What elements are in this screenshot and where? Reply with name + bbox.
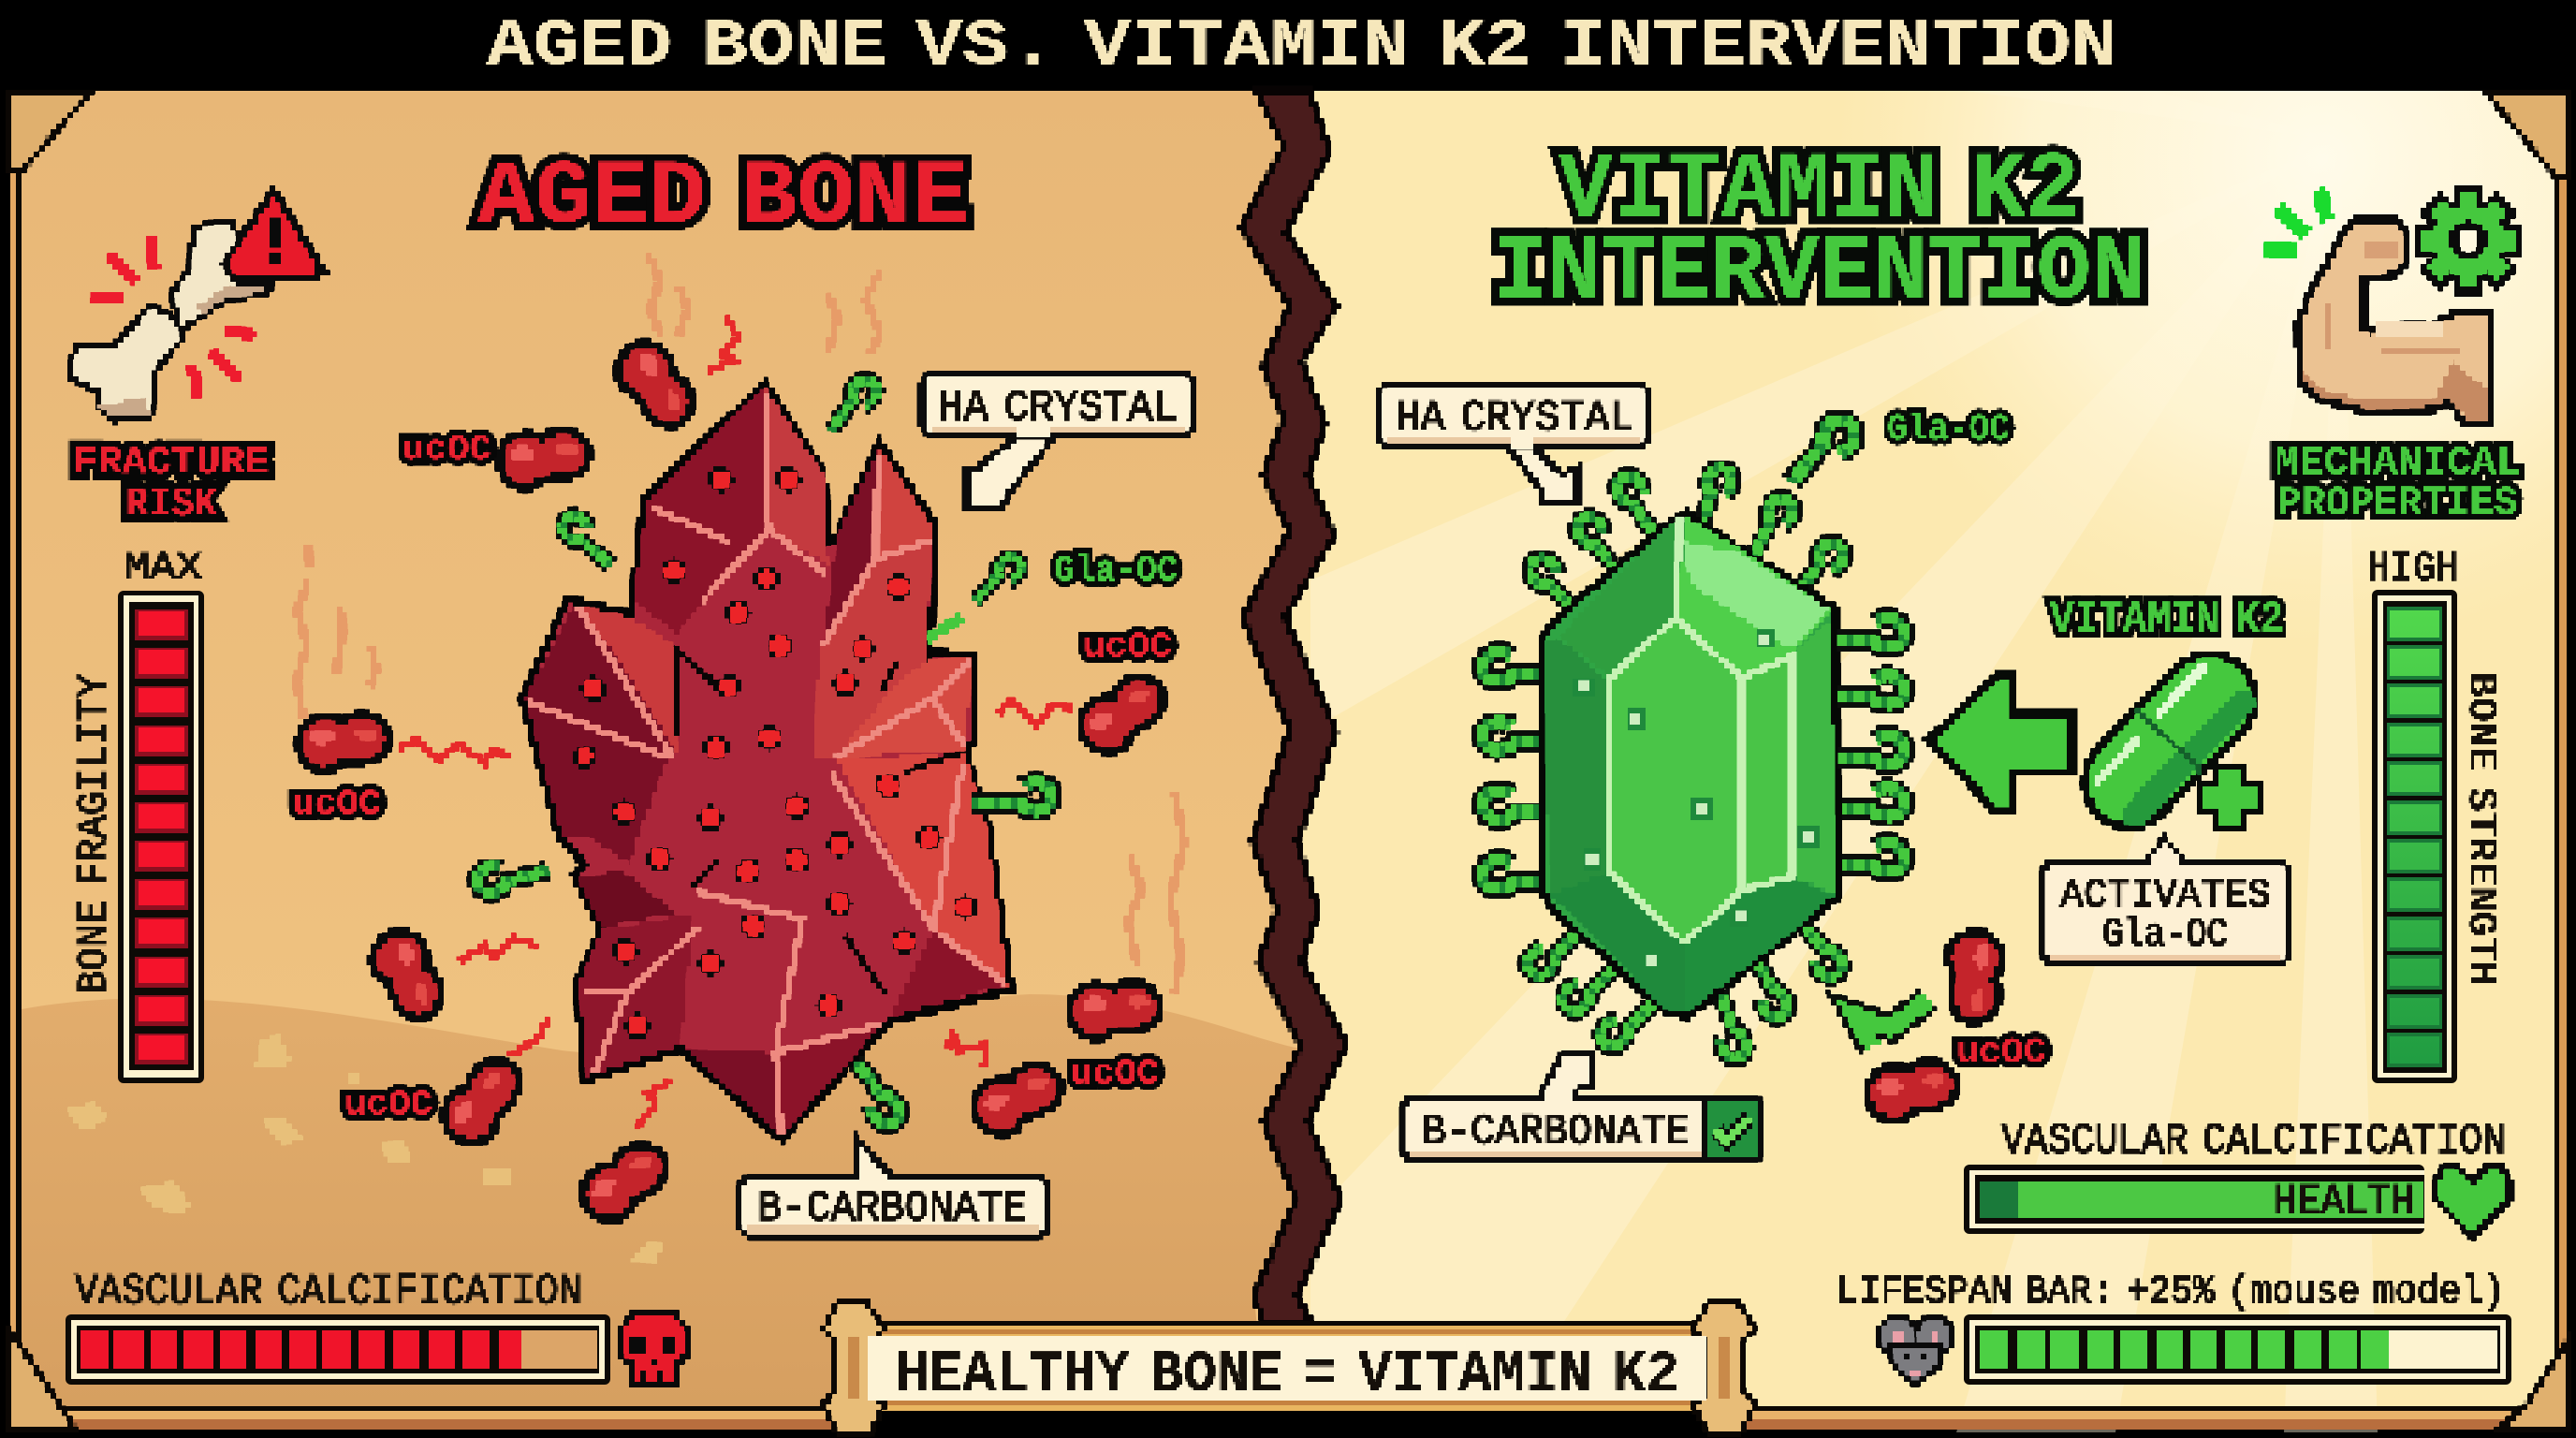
main title: AGED BONE VS. VITAMIN K2 INTERVENTION	[487, 10, 2117, 84]
bone strength meter	[2372, 590, 2457, 1083]
label: ucOC left: ucOC	[292, 785, 381, 825]
label: ucOC lower right: ucOC	[1071, 1054, 1159, 1094]
B-carbonate callout with checkmark	[1404, 1052, 1762, 1161]
HA crystal callout bubble right	[1378, 385, 1649, 503]
banner top border	[842, 1321, 1732, 1336]
callout text: B-carbonate: B-CARBONATE	[757, 1185, 1027, 1233]
callout text: HA crystal: HA CRYSTAL	[939, 384, 1178, 433]
sun rays	[1310, 91, 2378, 1432]
label: ucOC right panel: ucOC	[1956, 1033, 2046, 1073]
panel: aged bone	[66, 147, 1193, 1385]
B-carbonate callout bubble	[739, 1140, 1048, 1236]
label: risk: RISK	[125, 481, 218, 528]
vitamin K2 text labels	[1396, 139, 2521, 1314]
icon: fractured bone with warning	[69, 191, 324, 420]
left panel base	[22, 91, 1301, 1409]
icon: red skull	[621, 1314, 686, 1384]
black base under banner	[842, 1411, 1732, 1438]
icon: plus sign	[2202, 768, 2259, 827]
label: fracture risk: FRACTURE	[73, 440, 270, 485]
aged bone text labels	[71, 147, 1178, 1316]
label: ucOC right: ucOC	[1083, 627, 1172, 668]
activates callout bubble	[2043, 838, 2289, 964]
arrow: K2 to crystal	[1929, 676, 2071, 810]
label: Gla-OC: Gla-OC	[1054, 550, 1178, 593]
heading: vitamin K2: VITAMIN K2	[1559, 139, 2080, 244]
bone end: left	[824, 1303, 884, 1432]
callout text: HA crystal right: HA CRYSTAL	[1396, 394, 1634, 443]
label: vascular calcification: VASCULAR CALCIFICATION	[75, 1268, 582, 1316]
vitamin K2 pixel art	[1378, 186, 2523, 1384]
icon: mouse	[1879, 1317, 1953, 1384]
vascular health bar	[1964, 1165, 2424, 1234]
icon: vitamin K2 capsule	[2067, 636, 2273, 845]
mineral dots on red crystal	[573, 466, 977, 1039]
lifespan bar	[1964, 1314, 2511, 1385]
callout text: B-carbonate right: B-CARBONATE	[1422, 1108, 1690, 1156]
right panel base	[1292, 91, 2555, 1409]
label: ucOC lower left: ucOC	[344, 1085, 432, 1125]
heat waves	[297, 255, 1184, 992]
label: Gla-OC right: Gla-OC	[1887, 409, 2010, 451]
loose hook fragment	[1855, 1000, 1928, 1047]
heading: aged bone: AGED BONE	[477, 147, 969, 250]
panel: vitamin K2 intervention	[1378, 139, 2523, 1385]
heading: intervention: INTERVENTION	[1493, 222, 2145, 325]
red HA crystal cluster	[522, 384, 1011, 1139]
green HA crystal	[1483, 414, 1904, 1063]
red squiggles	[399, 318, 1074, 1128]
central crack divider	[1242, 91, 1346, 1322]
red ucOC particles right	[1857, 924, 2022, 1139]
bone fragility meter	[118, 591, 204, 1083]
label: vitamin K2 small: VITAMIN K2	[2050, 595, 2284, 646]
label: lifespan bar: LIFESPAN BAR: +25% (mouse model)	[1837, 1269, 2505, 1314]
vascular calcification bar aged	[66, 1314, 610, 1385]
callout text: Gla-OC: Gla-OC	[2102, 912, 2228, 959]
banner plate	[868, 1336, 1706, 1401]
sun glow	[1825, 91, 2555, 671]
label: health: HEALTH	[2274, 1178, 2415, 1226]
label: vascular calcification right: VASCULAR CALCIFICATION	[2001, 1117, 2506, 1166]
bound Gla-OC hooks behind crystal	[1483, 414, 1904, 1063]
sand specks	[67, 1035, 663, 1262]
banner lower border	[842, 1401, 1732, 1411]
callout text: activates: ACTIVATES	[2060, 873, 2271, 919]
icon: green gear	[2414, 186, 2523, 295]
red ucOC particles	[289, 334, 1170, 1235]
bone end: right	[1692, 1303, 1755, 1432]
displaced Gla-OC hooks	[475, 375, 1052, 1129]
left panel sand dune	[22, 994, 1299, 1409]
label: properties: PROPERTIES	[2277, 480, 2518, 527]
label: max: MAX	[124, 546, 202, 591]
label: ucOC top: ucOC	[402, 430, 491, 470]
label: mechanical: MECHANICAL	[2275, 440, 2521, 487]
aged bone pixel art	[67, 191, 1193, 1384]
label: bone strength: BONE STRENGTH	[2457, 672, 2504, 986]
bottom banner	[824, 1303, 1755, 1438]
HA crystal callout bubble	[922, 374, 1193, 507]
label: high: HIGH	[2367, 546, 2458, 593]
banner text: HEALTHY BONE = VITAMIN K2	[896, 1342, 1679, 1408]
icon: flexed arm	[2298, 220, 2490, 423]
green strength ticks	[2265, 189, 2327, 251]
icon: green heart	[2436, 1167, 2510, 1237]
label: bone fragility: BONE FRAGILITY	[71, 674, 118, 994]
